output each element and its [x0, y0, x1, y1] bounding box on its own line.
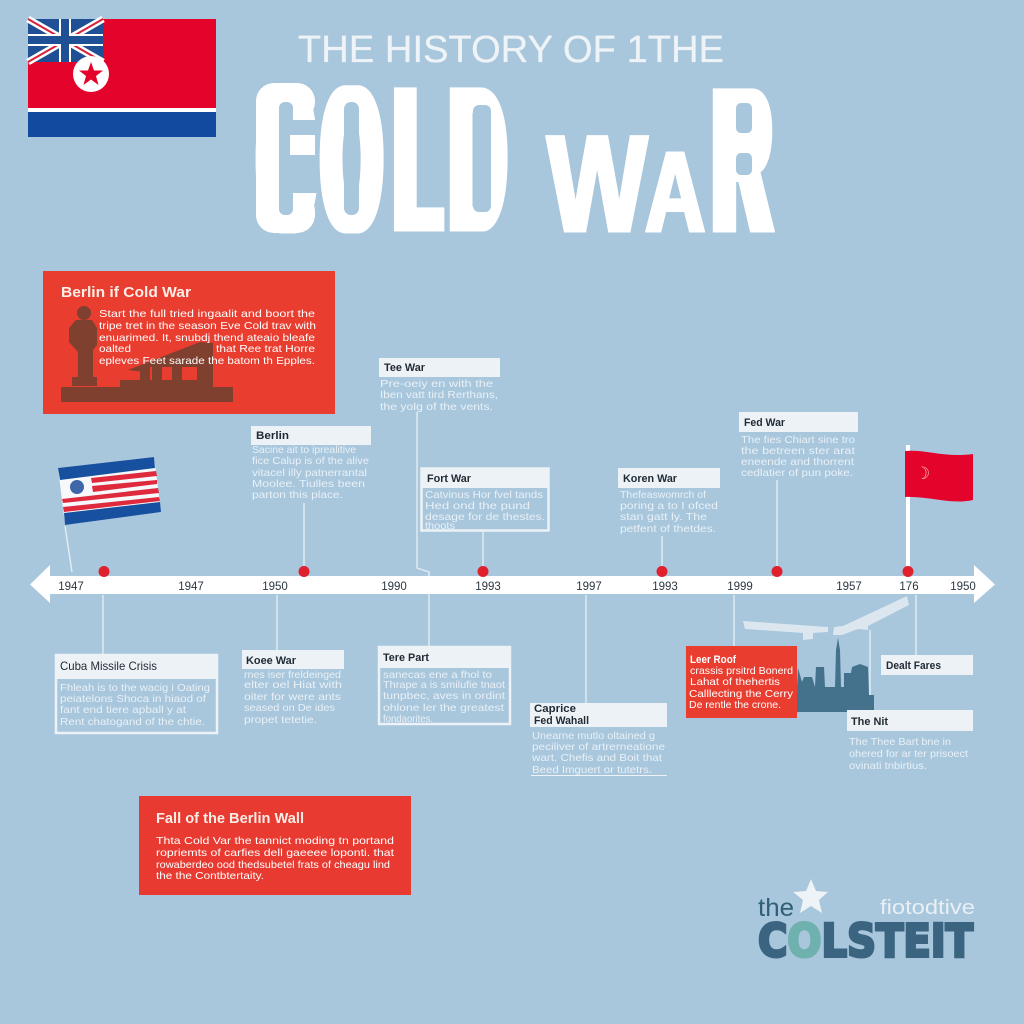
timeline years: 1990	[381, 581, 407, 593]
card: Tere Part: ohlone ler the greatest	[383, 702, 504, 714]
timeline markers	[98, 566, 782, 577]
logo: COLSTEIT	[758, 914, 973, 968]
timeline years: 1950	[262, 581, 288, 593]
card: Lost Part (red): Calllecting the Cerry	[689, 688, 794, 700]
card: Capriced Fed Wahall	[530, 703, 667, 776]
icon: red flag on pole	[902, 445, 973, 577]
top-left flag	[28, 19, 216, 137]
panel: Berlin if Cold War: tripe tret in the season Eve Cold trav with	[99, 320, 316, 332]
panel: Fall of the Berlin Wall: ropriemts of carfies dell gaeeee loponti. that	[156, 847, 394, 859]
card: Tere Part: sanecas ene a fhol to	[383, 669, 492, 681]
card: Tee War: the yolg of the vents.	[380, 401, 493, 413]
card: The Nit: The Thee Bart bne in	[849, 736, 951, 748]
card: Capriced Fed Wahall: Unearne mutlo oltained g	[532, 730, 655, 742]
timeline years: 1993	[652, 581, 678, 593]
card: Cuba Missile Crisis: Fhleah is to the wacig i Oating	[60, 682, 210, 694]
panel: Berlin if Cold War: Start the full tried ingaalit and boort the	[99, 308, 315, 320]
card: Fort War: Catvinus Hor fvel tands	[425, 489, 543, 501]
title: A	[645, 129, 705, 257]
card: Fed War: Fed War	[744, 417, 786, 429]
card: Berlin: Sacine ait to iprealitive	[252, 444, 356, 456]
card: Capriced Fed Wahall: wart. Chefis and Boit that	[531, 752, 662, 764]
card: The Nit: ovinati tnbirtius.	[849, 760, 927, 772]
card: Capriced Fed Wahall: peciliver of artrerneatione	[532, 741, 665, 753]
card: Berlin	[251, 426, 371, 501]
card: Koren War: Koren War	[623, 473, 678, 485]
card: Tee War: Pre-oeiy en with the	[380, 378, 493, 390]
panel: Berlin if Cold War: Berlin if Cold War	[61, 285, 191, 301]
card: Lost Part (red): Lahat of thehertis	[690, 676, 780, 688]
card: Tee War: Iben vatt tird Rerthans,	[380, 389, 498, 401]
card: Berlin: Moolee. Tiulles been	[252, 478, 365, 490]
card: Fort War: Fort War	[427, 473, 472, 485]
card: Fort War	[421, 468, 549, 532]
card: Kore War: rnes iser freldeinged	[244, 669, 341, 681]
timeline years	[58, 581, 976, 593]
card: Berlin: Berlin	[256, 430, 289, 442]
card: The Nit: The Nit	[851, 716, 888, 728]
icon: skyline with aircraft shapes	[743, 596, 909, 712]
icon: red flag on pole: ☽	[915, 464, 930, 483]
card: Lost Part (red): Leer Roof	[690, 654, 736, 666]
card: Capriced Fed Wahall: Beed Imguert or tutetrs.	[532, 764, 652, 776]
timeline arrow	[30, 565, 995, 603]
card: Cuba Missile Crisis: peiatelons Shoca in hiaod of	[60, 693, 206, 705]
panel: Berlin if Cold War: epleves Feet sarade the batom th Epples.	[99, 355, 315, 367]
title: THE HISTORY OF 1THE	[298, 29, 724, 71]
card: Berlin: vitacel illy patnerrantal	[252, 467, 367, 479]
card: Cuba Missile Crisis: Rent chatogand of the chtie.	[60, 716, 205, 728]
panel: Fall of the Berlin Wall: Fall of the Berlin Wall	[156, 811, 304, 827]
card: Capriced Fed Wahall: Caprice	[534, 703, 576, 715]
title: COLD	[258, 43, 505, 276]
card: Kore War: oiter for were ants	[244, 691, 341, 703]
panel: Berlin if Cold War	[43, 271, 335, 414]
card: The Nit	[847, 710, 973, 772]
card: Kore War: seased on De ides	[244, 702, 335, 714]
card: Koren War: stan gatt ly. The	[620, 511, 707, 523]
card: Tere Part: fondaorites.	[383, 713, 433, 725]
timeline years: 1999	[727, 581, 753, 593]
panel: Fall of the Berlin Wall: rowaberdeo ood thedsubetel frats of cheagu lind	[156, 859, 390, 871]
card: Kore War	[242, 650, 344, 726]
logo: the	[758, 894, 794, 922]
timeline years: 1993	[475, 581, 501, 593]
card: Tere Part: tunpbec, aves in ordint	[383, 690, 505, 702]
card: The Nit: ohered for ar ter prisoect	[849, 748, 968, 760]
card: Berlin: fice Calup is of the alive	[252, 455, 369, 467]
card: Tere Part: Tere Part	[383, 652, 429, 664]
icon: statue and colonnade silhouette	[61, 306, 233, 402]
icon: striped flag	[58, 457, 161, 525]
timeline years: 176	[899, 581, 919, 593]
card: Dealt Fares: Dealt Fares	[886, 660, 941, 672]
card: Koren War: poring a to I ofced	[620, 500, 718, 512]
card: Koren War	[618, 468, 720, 535]
panel: Berlin if Cold War: enuarimed. It, snubdj thend ateaio bleafe	[99, 332, 315, 344]
panel: Berlin if Cold War: that Ree trat Horre	[216, 343, 315, 355]
timeline years: 1997	[576, 581, 602, 593]
card: Lost Part (red): crassis prsitrd Bonerd	[690, 665, 793, 677]
logo	[758, 879, 975, 968]
card: Fed War	[739, 412, 858, 479]
card: Lost Part (red): De rentle the crone.	[689, 699, 781, 711]
timeline years: 1947	[178, 581, 204, 593]
card: Berlin: parton this place.	[252, 489, 343, 501]
card: Tere Part	[378, 646, 511, 725]
card: Dealt Fares	[881, 655, 973, 675]
card: Cuba Missile Crisis	[55, 654, 218, 733]
card: Fed War: cedlatier of pun poke.	[741, 467, 853, 479]
logo: fiotodtive	[880, 897, 975, 919]
panel: Fall of the Berlin Wall: Thta Cold Var the tannict moding tn portand	[156, 835, 394, 847]
panel: Fall of the Berlin Wall: the the Contbtertaity.	[156, 870, 264, 882]
card: Lost Part (red)	[686, 646, 797, 718]
panel: Fall of the Berlin Wall	[139, 796, 411, 895]
card: Capriced Fed Wahall: Fed Wahall	[534, 715, 589, 727]
card: Fort War: Hed ond the pund	[425, 500, 530, 512]
card: Koren War: Thefeaswomrch of	[620, 489, 706, 501]
card: Tee War	[379, 358, 500, 413]
panel: Berlin if Cold War: oalted	[99, 343, 131, 355]
card: Fed War: The fies Chiart sine tro	[741, 434, 855, 446]
card: Cuba Missile Crisis: Cuba Missile Crisis	[60, 659, 157, 673]
title: W	[547, 106, 648, 262]
card: Fed War: the betreen ster arat	[741, 445, 855, 457]
title	[256, 29, 771, 277]
card: Kore War: propet tetetie.	[244, 714, 317, 726]
card: Tee War: Tee War	[384, 362, 426, 374]
card: Koren War: petfent of thetdes.	[620, 523, 716, 535]
card: Tere Part: Thrape a is smilufie tnaot	[383, 679, 505, 691]
card: Fed War: eneende and thorrent	[741, 456, 854, 468]
card: Cuba Missile Crisis: fant end tiere apball y at	[60, 704, 186, 716]
card: Kore War: elter oel Hiat with	[244, 679, 342, 691]
title: R	[714, 46, 771, 277]
timeline years: 1957	[836, 581, 862, 593]
timeline years: 1950	[950, 581, 976, 593]
timeline years: 1947	[58, 581, 84, 593]
card: Fort War: thoots	[425, 520, 455, 532]
card: Kore War: Koee War	[246, 655, 297, 667]
card: Fort War: desage for de thestes.	[425, 511, 545, 523]
timeline connectors	[65, 412, 916, 712]
